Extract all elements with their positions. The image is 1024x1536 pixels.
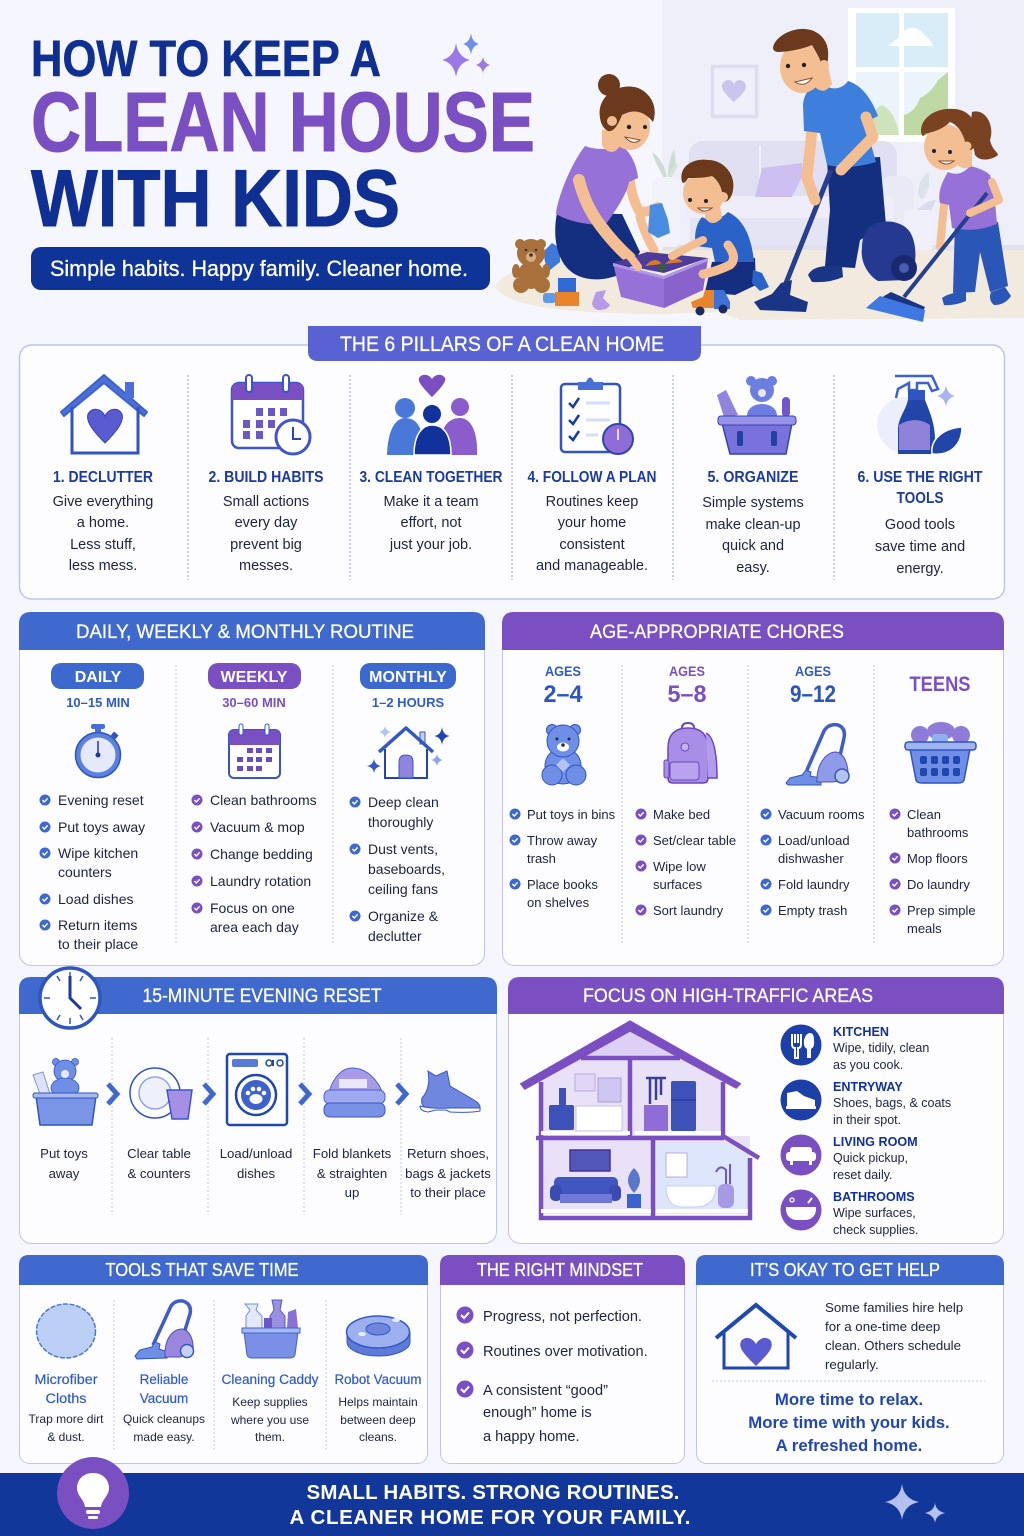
ages 9-12: AGES [795,663,831,679]
ages 2-4: Throw away [527,833,598,848]
sofa [684,141,914,245]
step 5: return shoes: Return shoes, [407,1146,489,1161]
ages 9-12: Empty trash [778,903,847,918]
ages 9-12 [760,663,865,918]
ages 9-12: Fold laundry [778,877,850,892]
area: bathrooms [780,1190,918,1237]
icon: stopwatch [76,724,120,778]
ages 2-4 [510,663,616,910]
ages 2-4: on shelves [527,895,590,910]
ages 9-12: Load/unload [778,833,850,848]
tool: reliable vacuum: made easy. [133,1430,195,1444]
monthly column [350,663,456,944]
panel: it's okay to get help: regularly. [825,1357,879,1372]
area: bathrooms: check supplies. [833,1223,918,1237]
step 5: return shoes: to their place [410,1185,486,1200]
panel: it's okay to get help: More time with your kids. [748,1413,950,1432]
sparkles [885,1484,945,1523]
ages 5-8: surfaces [653,877,703,892]
panel: it's okay to get help: More time to relax. [775,1390,923,1409]
pillar 5: organize [702,376,804,576]
sparkles near title [442,33,490,77]
toy bin [613,250,708,308]
tool: robot vacuum: Helps maintain [338,1395,418,1409]
tool: reliable vacuum [123,1301,205,1444]
panel: it's okay to get help: Some families hire help [825,1300,963,1315]
panel: evening reset: 15-MINUTE EVENING RESET [142,985,382,1007]
icon: house with heart [716,1305,796,1368]
step 5: return shoes [405,1071,491,1200]
panel: age-appropriate chores [502,612,1004,966]
panel: six pillars [20,326,1004,599]
footer banner [0,1457,1024,1536]
tool: microfiber cloths: Cloths [46,1391,87,1406]
tool: cleaning caddy: where you use [230,1413,309,1427]
pillar 6: right tools [858,376,983,577]
daily column: Wipe kitchen [58,845,138,861]
daily column: to their place [58,936,138,952]
area: kitchen [780,1024,929,1072]
pillar 6: right tools: 6. USE THE RIGHT [858,469,983,486]
ages 9-12: 9–12 [790,681,836,708]
pillar 4: follow a plan [528,378,656,574]
teens: Do laundry [907,877,970,892]
tool: microfiber cloths: Microfiber [34,1372,98,1387]
tool: robot vacuum [334,1316,422,1444]
weekly column: Change bedding [210,846,313,862]
monthly column: thoroughly [368,814,433,830]
pillar 4: follow a plan: Routines keep [546,494,638,510]
monthly column: Dust vents, [368,841,438,857]
pillar 6: right tools: energy. [896,561,944,577]
tool: robot vacuum: between deep [340,1413,416,1427]
panel: the right mindset: enough” home is [483,1405,592,1421]
tool: cleaning caddy [222,1300,319,1444]
ages 2-4: Put toys in bins [527,807,616,822]
panel: routine: DAILY, WEEKLY & MONTHLY ROUTINE [76,621,414,643]
area: bathrooms: Wipe surfaces, [833,1206,916,1220]
footer banner: A CLEANER HOME FOR YOUR FAMILY. [290,1506,690,1529]
weekly column: 30–60 MIN [222,695,286,710]
window [848,8,955,142]
subtitle pill [31,247,490,290]
teens [890,673,976,936]
daily column: Evening reset [58,792,144,808]
panel: routine [19,612,485,966]
pillar 2: build habits: 2. BUILD HABITS [208,469,324,486]
ages 9-12: Vacuum rooms [778,807,865,822]
picture frame with heart [712,66,756,116]
weekly column: WEEKLY [221,669,288,686]
tool: reliable vacuum: Quick cleanups [123,1412,205,1426]
step 1: put toys away: Put toys [40,1146,88,1161]
tool: microfiber cloths: & dust. [47,1430,85,1444]
icon: lightbulb [57,1457,129,1529]
panel: the right mindset [440,1255,685,1464]
monthly column: ceiling fans [368,881,438,897]
weekly column: Vacuum & mop [210,819,305,835]
monthly column: Organize & [368,908,439,924]
arrows between steps [108,1084,406,1104]
pillar 5: organize: easy. [736,560,770,576]
area: entryway: Shoes, bags, & coats [833,1096,951,1110]
area: kitchen: as you cook. [833,1058,903,1072]
panel: it's okay to get help: IT’S OKAY TO GET HELP [750,1260,940,1280]
ages 5-8 [636,663,736,918]
panel: it's okay to get help [696,1255,1004,1464]
pillar 5: organize: Simple systems [702,495,804,511]
ages 5-8: Set/clear table [653,833,736,848]
title: WITH KIDS [31,154,400,244]
mother [544,74,670,279]
icon: teddy bear [542,724,586,785]
daily column: 10–15 MIN [66,695,130,710]
living room [550,1150,641,1208]
step 2: clear table [127,1068,192,1181]
pillar 1: declutter: 1. DECLUTTER [53,469,153,486]
title [31,30,535,244]
pillar 4: follow a plan: and manageable. [536,558,648,574]
icon: calendar [229,724,280,778]
daily column: Put toys away [58,819,145,835]
panel: the right mindset: Progress, not perfection. [483,1309,642,1325]
pillar 4: follow a plan: consistent [559,537,625,553]
panel: high-traffic areas [508,977,1004,1244]
weekly column: area each day [210,919,299,935]
teddy bear and toys [512,239,730,316]
teens: meals [907,921,942,936]
bathroom [666,1153,734,1208]
girl with broom [866,109,1011,322]
step 3: load/unload dishes: dishes [237,1166,275,1181]
area: living room [780,1134,918,1182]
pillar 5: organize: make clean-up [705,517,801,533]
tool: cleaning caddy: Cleaning Caddy [222,1372,319,1387]
pillar 4: follow a plan: your home [558,515,626,531]
step 2: clear table: Clear table [127,1146,191,1161]
panel: tools that save time: TOOLS THAT SAVE TIME [106,1260,298,1280]
subtitle pill: Simple habits. Happy family. Cleaner home. [50,256,468,281]
pillar 3: clean together: just your job. [389,537,472,553]
pillar 3: clean together: 3. CLEAN TOGETHER [360,469,502,486]
pillar 6: right tools: save time and [875,539,965,555]
house cross-section [522,1022,759,1218]
father with vacuum [754,29,917,312]
ages 2-4: 2–4 [544,681,583,708]
daily column: DAILY [75,669,122,686]
title: CLEAN HOUSE [31,75,535,169]
tool: robot vacuum: Robot Vacuum [334,1372,422,1387]
pillar 6: right tools: Good tools [885,517,955,533]
title: HOW TO KEEP A [31,30,381,87]
tool: robot vacuum: cleans. [359,1430,397,1444]
panel: the right mindset: a happy home. [483,1429,580,1445]
daily column [40,663,145,952]
teens: Mop floors [907,851,968,866]
step 2: clear table: & counters [127,1166,191,1181]
monthly column: MONTHLY [369,669,447,686]
pillar 1: declutter [53,375,153,574]
area: kitchen: KITCHEN [833,1025,889,1039]
monthly column: Deep clean [368,794,439,810]
panel: high-traffic areas: FOCUS ON HIGH-TRAFFIC AREAS [583,985,873,1007]
teens: TEENS [910,673,970,696]
panel: the right mindset: Routines over motivation. [483,1344,648,1360]
tool: cleaning caddy: them. [255,1430,285,1444]
monthly column: 1–2 HOURS [372,695,444,710]
panel: the right mindset: THE RIGHT MINDSET [477,1260,643,1280]
step 1: put toys away: away [49,1166,80,1181]
area: living room: LIVING ROOM [833,1135,918,1149]
ages 2-4: AGES [545,663,581,679]
tool: reliable vacuum: Reliable [140,1372,188,1387]
pillar 1: declutter: Less stuff, [70,537,136,553]
pillar 2: build habits [208,375,324,574]
pillar 5: organize: quick and [722,538,784,554]
panel: it's okay to get help: A refreshed home. [776,1436,922,1455]
icon: clock [40,968,100,1028]
ages 2-4: trash [527,851,556,866]
pillar 5: organize: 5. ORGANIZE [708,469,798,486]
daily column: counters [58,864,112,880]
ages 5-8: Wipe low [653,859,706,874]
panel: tools that save time [19,1255,428,1464]
panel: it's okay to get help: for a one-time deep [825,1319,940,1334]
entryway [644,1078,696,1131]
pillar 2: build habits: messes. [239,558,293,574]
step 4: fold blankets: up [345,1185,359,1200]
ages 5-8: Sort laundry [653,903,724,918]
ages 9-12: dishwasher [778,851,844,866]
step 4: fold blankets: & straighten [317,1166,387,1181]
icon: house with sparkles [367,726,450,778]
area: living room: Quick pickup, [833,1151,908,1165]
panel: it's okay to get help: clean. Others schedule [825,1338,961,1353]
monthly column: baseboards, [368,861,445,877]
area: entryway: ENTRYWAY [833,1080,903,1094]
icon: vacuum [786,725,849,785]
monthly column: declutter [368,928,422,944]
pillar 2: build habits: prevent big [230,537,302,553]
area: entryway [780,1080,951,1127]
panel: evening reset [19,968,497,1244]
step 5: return shoes: bags & jackets [405,1166,491,1181]
tool: microfiber cloths: Trap more dirt [29,1412,104,1426]
area: bathrooms: BATHROOMS [833,1190,915,1204]
pillar 2: build habits: Small actions [223,494,309,510]
step 4: fold blankets: Fold blankets [313,1146,392,1161]
step 1: put toys away [33,1058,98,1181]
hero illustration: family cleaning together [495,0,1024,322]
area: living room: reset daily. [833,1168,893,1182]
ages 5-8: 5–8 [668,681,706,708]
ages 5-8: Make bed [653,807,710,822]
kitchen [549,1074,622,1131]
pillar 1: declutter: less mess. [69,558,137,574]
teens: Prep simple [907,903,976,918]
pale plants [652,150,936,250]
pillar 1: declutter: Give everything [53,494,153,510]
weekly column: Clean bathrooms [210,792,317,808]
pillar 1: declutter: a home. [77,515,129,531]
step 4: fold blankets [313,1068,392,1200]
icon: backpack [664,723,717,783]
pillar 4: follow a plan: 4. FOLLOW A PLAN [528,469,656,486]
ages 2-4: Place books [527,877,598,892]
panel: age-appropriate chores: AGE-APPROPRIATE CHORES [590,621,844,643]
daily column: Return items [58,917,137,933]
teens: Clean [907,807,941,822]
step 3: load/unload dishes [220,1054,292,1181]
ages 5-8: AGES [669,663,705,679]
panel: six pillars: THE 6 PILLARS OF A CLEAN HOME [340,333,664,356]
area: kitchen: Wipe, tidily, clean [833,1041,929,1055]
daily column: Load dishes [58,891,134,907]
area: entryway: in their spot. [833,1113,901,1127]
step 3: load/unload dishes: Load/unload [220,1146,292,1161]
tool: microfiber cloths [29,1304,104,1444]
teens: bathrooms [907,825,969,840]
weekly column [192,663,317,935]
boy [672,160,769,295]
pillar 3: clean together: effort, not [400,515,462,531]
pillar 2: build habits: every day [235,515,298,531]
pillar 6: right tools: TOOLS [896,490,944,507]
icon: laundry basket [905,722,976,783]
tool: reliable vacuum: Vacuum [140,1391,188,1406]
tool: cleaning caddy: Keep supplies [232,1395,308,1409]
panel: the right mindset: A consistent “good” [483,1383,608,1399]
pillar 3: clean together [360,375,502,553]
footer banner: SMALL HABITS. STRONG ROUTINES. [306,1481,680,1504]
pillar 3: clean together: Make it a team [383,494,479,510]
weekly column: Laundry rotation [210,873,311,889]
weekly column: Focus on one [210,900,295,916]
